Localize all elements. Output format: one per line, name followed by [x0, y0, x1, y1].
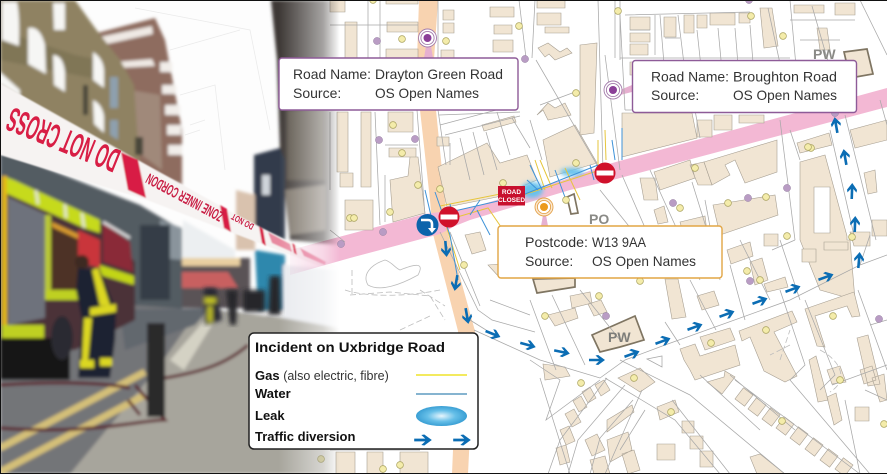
connector stubs [424, 46, 632, 226]
marker: postcode [535, 198, 553, 216]
callout: Drayton Green Road: Drayton Green Road [375, 66, 503, 82]
park dashed paths [345, 260, 841, 392]
stone building [0, 0, 143, 170]
label PW south: PW [608, 329, 631, 345]
pavement [70, 308, 340, 474]
sky [290, 242, 336, 269]
red brick building [97, 18, 182, 185]
callout: Drayton Green Road [279, 58, 518, 110]
right dark building [271, 0, 340, 245]
road closed sign: CLOSED [498, 197, 525, 204]
map background [280, 0, 887, 474]
no entry sign west [438, 206, 460, 228]
legend: gas: Gas (also electric, fibre) [255, 368, 389, 383]
callout: Broughton Road: OS Open Names [733, 87, 837, 103]
fire engine [0, 176, 135, 380]
callout: postcode [498, 226, 722, 278]
road closed sign [498, 186, 525, 206]
legend: traffic diversion [255, 429, 471, 446]
callout: Broughton Road: Road Name: [651, 68, 729, 84]
buildings with heavy outline [533, 49, 873, 352]
cordon tape [0, 83, 340, 268]
white wall [280, 262, 325, 323]
distant pedestrians [226, 276, 281, 325]
building footprints [330, 0, 887, 474]
callout: Drayton Green Road: OS Open Names [375, 85, 479, 101]
tape lettering: distant: DO NOT [229, 211, 256, 232]
bollard [147, 323, 165, 417]
firefighter [75, 255, 116, 378]
road and parcel lines [330, 0, 887, 474]
marker: Drayton Green Road [418, 29, 436, 47]
diversion sign [416, 214, 438, 236]
shopfront behind engine [0, 150, 182, 320]
legend panel [249, 333, 478, 449]
ghost map lines in sky [135, 8, 270, 170]
blue building [254, 148, 285, 240]
road closed sign: ROAD [502, 189, 521, 196]
road: Drayton Green Road (orange) [417, 0, 475, 474]
fire incident photograph [0, 0, 340, 474]
double yellow lines [0, 372, 145, 472]
callout: Broughton Road: Broughton Road [733, 68, 837, 84]
callout: postcode: W13 9AA [592, 234, 647, 250]
legend: traffic diversion: Traffic diversion [255, 429, 355, 444]
legend: leak [255, 406, 467, 426]
callout: Drayton Green Road: Road Name: [293, 66, 371, 82]
label PO: PO [589, 211, 609, 227]
callout: postcode: Postcode: [525, 234, 588, 250]
street map [290, 0, 887, 474]
amenity dots [318, 0, 887, 472]
gas and water utilities [425, 128, 622, 280]
distant buildings [172, 190, 285, 310]
callout: postcode: Source: [525, 253, 573, 269]
label PW north-east: PW [813, 46, 836, 62]
callout: Broughton Road: Source: [651, 87, 699, 103]
legend: leak: Leak [255, 408, 285, 423]
hoses [0, 345, 248, 430]
legend title: Incident on Uxbridge Road [255, 340, 445, 355]
callout: postcode: OS Open Names [592, 253, 696, 269]
tape lettering: cordon: ZONE INNER CORDON [143, 170, 226, 224]
marker: Broughton Road [604, 81, 622, 99]
leak patches [521, 168, 584, 198]
distant firefighter [204, 288, 222, 325]
callout: Drayton Green Road: Source: [293, 85, 341, 101]
road: Uxbridge Road (pink) [290, 88, 887, 275]
road surface [0, 305, 200, 474]
no entry sign east [594, 162, 616, 184]
callout: Broughton Road [632, 60, 856, 112]
traffic diversion arrows [440, 116, 865, 365]
legend: water: Water [255, 386, 291, 401]
